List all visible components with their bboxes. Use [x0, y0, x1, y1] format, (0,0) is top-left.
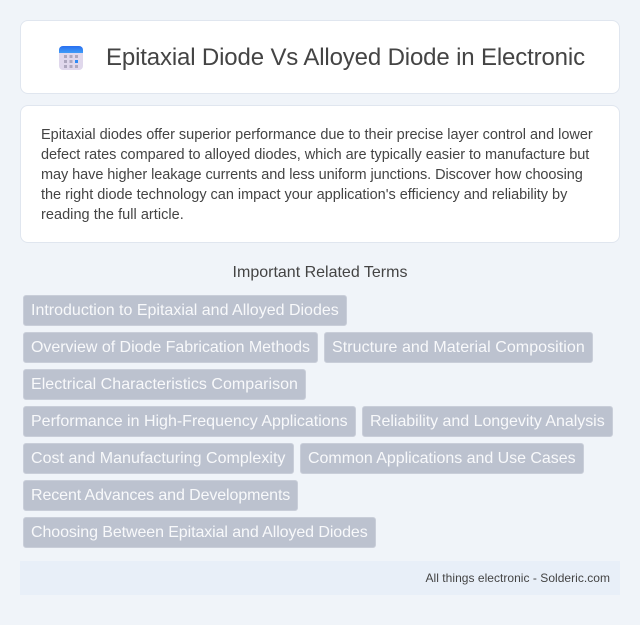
footer credit: All things electronic - Solderic.com — [426, 571, 610, 585]
tag — [23, 332, 318, 363]
tag — [23, 517, 376, 548]
tag — [324, 332, 593, 363]
tag: Introduction to Epitaxial and Alloyed Diodes — [31, 302, 339, 319]
intro text: defect rates compared to alloyed diodes, which are typically easier to manufacture but — [41, 147, 589, 163]
tag list — [23, 295, 613, 548]
intro text: reading the full article. — [41, 207, 184, 223]
tag: Common Applications and Use Cases — [308, 450, 576, 467]
tag — [23, 295, 347, 326]
section heading: Important Related Terms — [233, 264, 407, 281]
tag — [23, 480, 298, 511]
intro text: Epitaxial diodes offer superior performance due to their precise layer control and lower — [41, 127, 593, 143]
tag — [23, 369, 306, 400]
tag: Reliability and Longevity Analysis — [370, 413, 605, 430]
tag: Overview of Diode Fabrication Methods — [31, 339, 310, 356]
footer — [20, 561, 620, 595]
header card — [20, 20, 620, 94]
intro text: may have higher leakage currents and less uniform junctions. Discover how choosing — [41, 167, 583, 183]
title: Epitaxial Diode Vs Alloyed Diode in Electronic — [106, 44, 585, 71]
tag: Cost and Manufacturing Complexity — [31, 450, 285, 467]
tag: Recent Advances and Developments — [31, 487, 290, 504]
intro text — [41, 127, 593, 223]
tag — [362, 406, 613, 437]
tag — [300, 443, 584, 474]
tag — [23, 443, 294, 474]
icon: calendar — [59, 46, 83, 70]
tag: Electrical Characteristics Comparison — [31, 376, 298, 393]
tag: Performance in High-Frequency Applications — [31, 413, 348, 430]
tag: Structure and Material Composition — [332, 339, 585, 356]
intro card — [20, 105, 620, 243]
intro text: the right diode technology can impact your application's efficiency and reliability by — [41, 187, 567, 203]
tag: Choosing Between Epitaxial and Alloyed Diodes — [31, 524, 368, 541]
tag — [23, 406, 356, 437]
